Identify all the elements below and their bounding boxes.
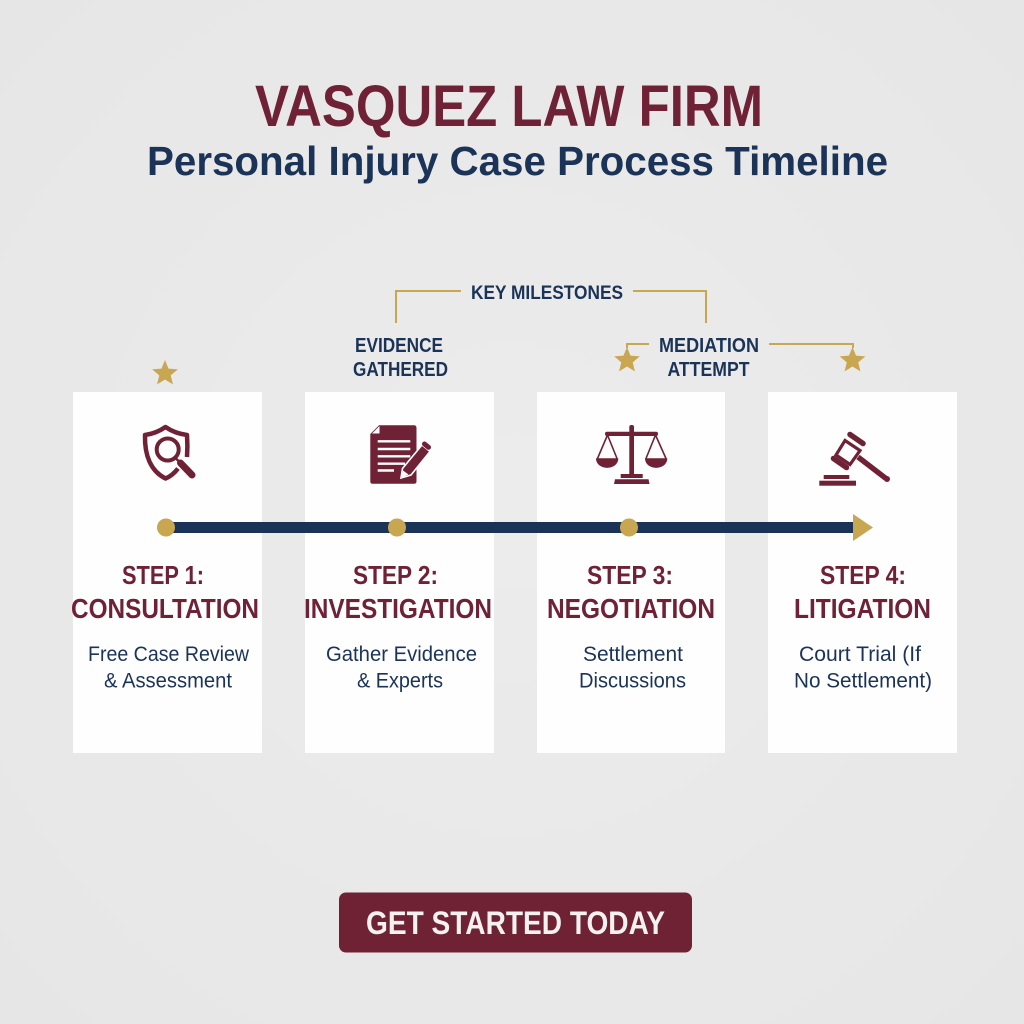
panel: step 1 card xyxy=(73,392,262,753)
step 1 text: CONSULTATION xyxy=(71,593,259,624)
step 3 text: NEGOTIATION xyxy=(547,593,715,624)
step 2 text: STEP 2: xyxy=(353,560,438,590)
panel: step 2 card xyxy=(305,392,494,753)
milestone: mediation attempt xyxy=(659,335,759,381)
icon: document with pen xyxy=(370,425,430,484)
star: step 1 xyxy=(152,360,178,384)
icon: gavel xyxy=(819,434,890,486)
step 3 text: Settlement xyxy=(583,643,683,666)
milestone: mediation attempt: MEDIATION xyxy=(659,335,759,357)
key milestones bracket xyxy=(396,283,706,323)
step 4 text xyxy=(794,560,932,692)
timeline arrowhead xyxy=(853,514,873,541)
step 3 text: Discussions xyxy=(579,670,686,692)
step 4 text: STEP 4: xyxy=(820,560,906,590)
step 4 text: LITIGATION xyxy=(794,593,931,624)
step 3 text xyxy=(547,560,715,692)
step 2 text: INVESTIGATION xyxy=(304,593,492,624)
timeline dot 1 xyxy=(157,518,175,536)
icon: shield with magnifying glass xyxy=(145,427,192,478)
step 4 text: Court Trial (If xyxy=(799,643,921,666)
subtitle: Personal Injury Case Process Timeline xyxy=(147,138,888,184)
milestone: evidence gathered: GATHERED xyxy=(353,359,448,381)
timeline dot 2 xyxy=(388,518,406,536)
star: step 3 xyxy=(614,347,640,371)
milestone: mediation attempt: ATTEMPT xyxy=(668,359,750,381)
milestone: evidence gathered: EVIDENCE xyxy=(355,335,443,357)
step 1 text: STEP 1: xyxy=(122,560,204,590)
step 2 text: Gather Evidence xyxy=(326,643,477,666)
step 1 text: Free Case Review xyxy=(88,643,250,666)
step 3 text: STEP 3: xyxy=(587,560,673,590)
timeline bar xyxy=(166,522,856,533)
step 1 text: & Assessment xyxy=(104,670,232,692)
panel: step 3 card xyxy=(537,392,725,753)
icon: scales of justice xyxy=(596,425,667,484)
step 2 text xyxy=(304,560,492,692)
step 1 text xyxy=(71,560,259,692)
mediation connector lines xyxy=(627,344,853,348)
button: get started today xyxy=(339,892,692,952)
timeline dot 3 xyxy=(620,518,638,536)
title: VASQUEZ LAW FIRM xyxy=(255,74,763,139)
step 4 text: No Settlement) xyxy=(794,670,932,692)
panel: step 4 card xyxy=(768,392,957,753)
key milestones bracket: KEY MILESTONES xyxy=(471,283,623,304)
milestone: evidence gathered xyxy=(353,335,448,381)
step 2 text: & Experts xyxy=(357,670,443,692)
star: step 4 xyxy=(840,347,865,371)
button: get started today: GET STARTED TODAY xyxy=(366,905,665,941)
